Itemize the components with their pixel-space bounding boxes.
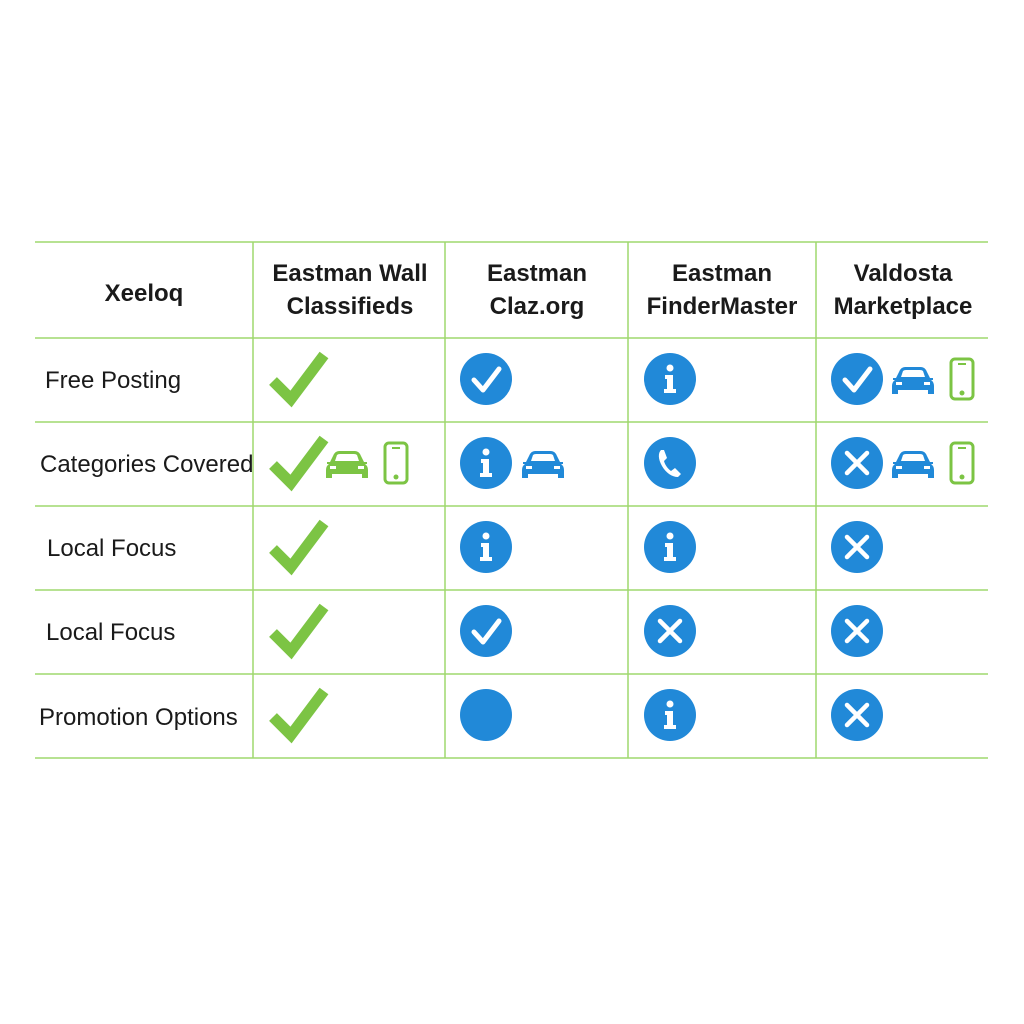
header row: Xeeloq — [105, 280, 183, 307]
header row: Eastman Wall — [272, 260, 428, 287]
row 4 icons: Local Focus — [273, 605, 883, 657]
row labels: Local Focus — [47, 535, 176, 562]
header row — [105, 260, 972, 320]
header row: Classifieds — [287, 293, 413, 320]
row labels: Free Posting — [45, 367, 181, 394]
row labels — [39, 367, 253, 731]
row labels: Categories Covered — [40, 451, 253, 478]
row 2 icons: Categories Covered — [273, 437, 973, 489]
header row: Claz.org — [490, 293, 584, 320]
row 3 icons: Local Focus — [273, 521, 883, 573]
grid lines — [35, 242, 988, 758]
header row: Marketplace — [834, 293, 972, 320]
header row: Eastman — [487, 260, 587, 287]
row labels: Local Focus — [46, 619, 175, 646]
row labels: Promotion Options — [39, 704, 238, 731]
row 5 icons: Promotion Options — [273, 689, 883, 741]
header row: FinderMaster — [647, 293, 797, 320]
row 1 icons: Free Posting — [273, 353, 973, 405]
header row: Eastman — [672, 260, 772, 287]
header row: Valdosta — [854, 260, 953, 287]
